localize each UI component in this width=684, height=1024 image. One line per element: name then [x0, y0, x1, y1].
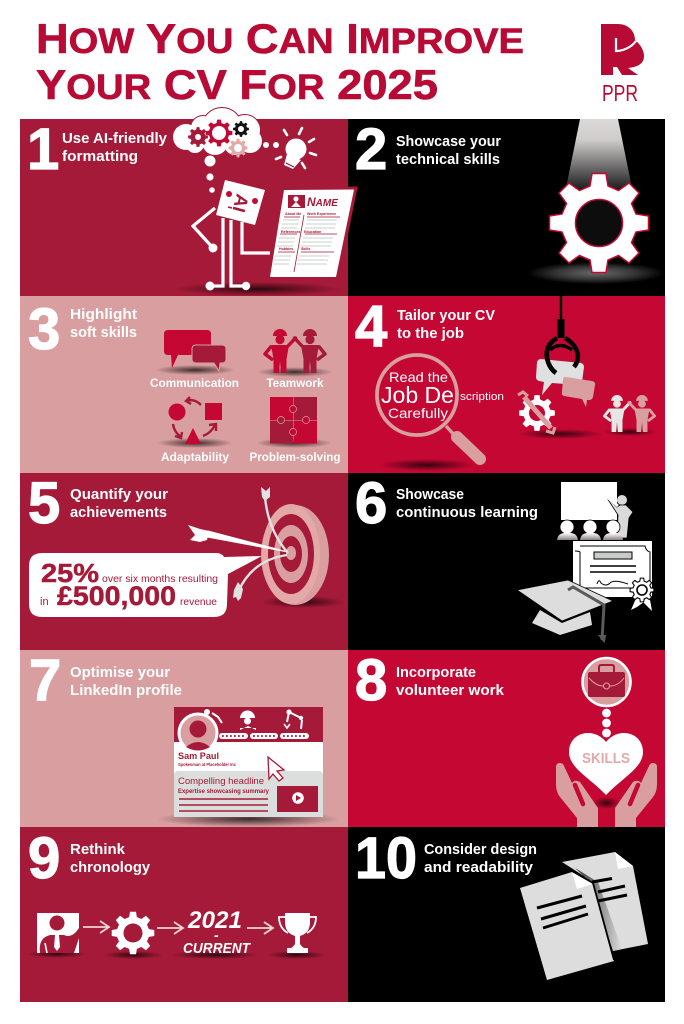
- CV document: Work Experience: [307, 212, 336, 216]
- summary panel: [174, 771, 323, 817]
- icon: presentation: [557, 482, 633, 540]
- cursor: [268, 757, 284, 781]
- icon: hands: [556, 763, 657, 827]
- name and role: [178, 751, 237, 767]
- magnifier with text: scription: [460, 391, 504, 403]
- panel 3: soft skills: soft skills: [70, 325, 137, 341]
- date range: CURRENT: [183, 941, 251, 957]
- summary panel: Compelling headline: [178, 776, 264, 787]
- panel 5: quantify achievements: [20, 471, 348, 650]
- profile card: [174, 707, 323, 817]
- shadow under profile card: [156, 811, 340, 827]
- magnifier with text: Job De: [381, 382, 454, 408]
- panel 7: LinkedIn profile: LinkedIn profile: [70, 683, 182, 699]
- arrow: [247, 922, 273, 934]
- number 6: 6: [355, 471, 387, 536]
- heading 1: Use AI-friendly: [62, 131, 167, 147]
- heading 3: Highlight: [70, 307, 137, 323]
- icon: target: [261, 504, 345, 608]
- icon: person: [37, 913, 79, 953]
- panel 5: quantify achievements: achievements: [70, 505, 167, 521]
- icon: adaptability: [157, 397, 233, 448]
- callout: results: in: [40, 596, 49, 608]
- heading 8: Incorporate: [396, 665, 476, 681]
- panel 9: rethink chronology: chronology: [70, 860, 150, 876]
- callout: results: £500,000: [57, 581, 176, 611]
- icon: communication: [155, 330, 235, 375]
- date range: 2021: [187, 907, 242, 934]
- magnifier with text: Read the: [389, 369, 448, 385]
- date range: [183, 907, 251, 957]
- heading 6: Showcase: [396, 487, 464, 503]
- panel 4: tailor CV: [348, 294, 665, 473]
- shadows: [27, 950, 327, 959]
- name and role: Spokesman at Placeholder Inc: [178, 762, 237, 767]
- icon: teamwork: [257, 329, 333, 377]
- callout: results: 25%: [41, 558, 99, 588]
- spotlight beam: [566, 119, 632, 188]
- number 7: 7: [29, 648, 61, 713]
- panel 10: design and readability: [348, 826, 665, 1002]
- panel 9: rethink chronology: [20, 826, 348, 1002]
- CV document: Hobbies: [279, 247, 293, 251]
- CV document: [270, 187, 357, 277]
- number 5: 5: [28, 471, 60, 536]
- summary panel: Expertise showcasing summary: [178, 788, 270, 795]
- number 1: 1: [27, 117, 59, 182]
- CV document: Skills: [301, 247, 310, 251]
- panel 1: AI-friendly formatting: [20, 108, 357, 296]
- icon: wrench and gear: [518, 392, 602, 439]
- icon: back page: [562, 852, 648, 951]
- CV document: Education: [304, 230, 321, 234]
- icon: two engineers: [604, 395, 656, 436]
- label: problem-solving: Problem-solving: [250, 450, 340, 464]
- label: adaptability: Adaptability: [161, 450, 229, 464]
- heading 7: Optimise your: [70, 665, 170, 681]
- title: [36, 15, 524, 108]
- panel 1: AI-friendly formatting: formatting: [62, 149, 138, 165]
- robotic claw: [547, 296, 578, 373]
- number 3: 3: [28, 297, 60, 362]
- icon: puzzle: [256, 397, 332, 448]
- title: YOUR CV F OR 2025: [36, 61, 438, 108]
- panel 8: volunteer work: [348, 648, 665, 827]
- floor glow: [528, 262, 664, 284]
- icon: gear: [112, 912, 154, 954]
- speech bubbles: [536, 359, 595, 407]
- title: HOW YOU CAN IMPROVE: [36, 15, 524, 62]
- heading 9: Rethink: [70, 842, 126, 858]
- heading 2: Showcase your: [396, 134, 501, 150]
- label: communication: Communication: [150, 376, 239, 390]
- callout: results: over six months resulting: [102, 573, 218, 585]
- number 9: 9: [28, 826, 60, 891]
- CV document: NAME: [307, 195, 338, 209]
- icon: front page: [520, 871, 614, 980]
- icon: gear: [550, 174, 648, 272]
- heading 10: Consider design: [424, 842, 537, 858]
- panel 6: continuous learning: continuous learning: [396, 505, 538, 521]
- heading 4: Tailor your CV: [397, 308, 495, 324]
- icon: lightbulb: [276, 128, 316, 169]
- CV document: References: [281, 230, 300, 234]
- logo: PPR: [601, 24, 644, 106]
- magnifier with text: Carefully: [388, 405, 448, 421]
- icon: briefcase in circle: [582, 658, 630, 706]
- icon: AI robot: [193, 180, 270, 290]
- logo: PPR: PPR: [602, 80, 638, 106]
- magnifier with text: [377, 355, 504, 471]
- icon: trophy: [279, 913, 316, 953]
- avatar: [179, 714, 217, 752]
- panel 2: technical skills: [348, 117, 665, 296]
- panel 6: continuous learning: [348, 471, 665, 650]
- beads: [602, 709, 611, 737]
- heart with skills: SKILLS: [582, 751, 630, 767]
- heading 5: Quantify your: [70, 487, 168, 503]
- arrow: [83, 921, 109, 933]
- icon: thought cloud with gears: [173, 108, 279, 193]
- heart with skills: [569, 733, 643, 795]
- number 8: 8: [355, 648, 387, 713]
- callout: results: revenue: [180, 596, 217, 608]
- icon: graduation cap: [517, 580, 613, 641]
- shadow under robot: [173, 282, 341, 296]
- date range: -: [214, 927, 219, 943]
- panel 10: design and readability: and readability: [424, 860, 533, 876]
- panel 3: soft skills: [20, 296, 348, 473]
- card banner with robots: [174, 707, 323, 742]
- panel 2: technical skills: technical skills: [396, 152, 500, 168]
- callout: results: [29, 553, 262, 617]
- arrows hitting target: [188, 487, 288, 601]
- label: teamwork: Teamwork: [266, 376, 324, 390]
- icon: certificate: [573, 541, 654, 611]
- number 2: 2: [355, 117, 387, 182]
- name and role: Sam Paul: [178, 751, 219, 762]
- icon: AI robot: AI: [228, 192, 252, 215]
- number 4: 4: [355, 294, 387, 359]
- number 10: 10: [355, 826, 417, 891]
- arrow: [157, 922, 183, 934]
- panel 8: volunteer work: volunteer work: [396, 683, 505, 699]
- panel 4: tailor CV: to the job: [397, 326, 464, 342]
- CV document: About Me: [285, 212, 301, 216]
- panel 7: LinkedIn profile: [20, 648, 348, 827]
